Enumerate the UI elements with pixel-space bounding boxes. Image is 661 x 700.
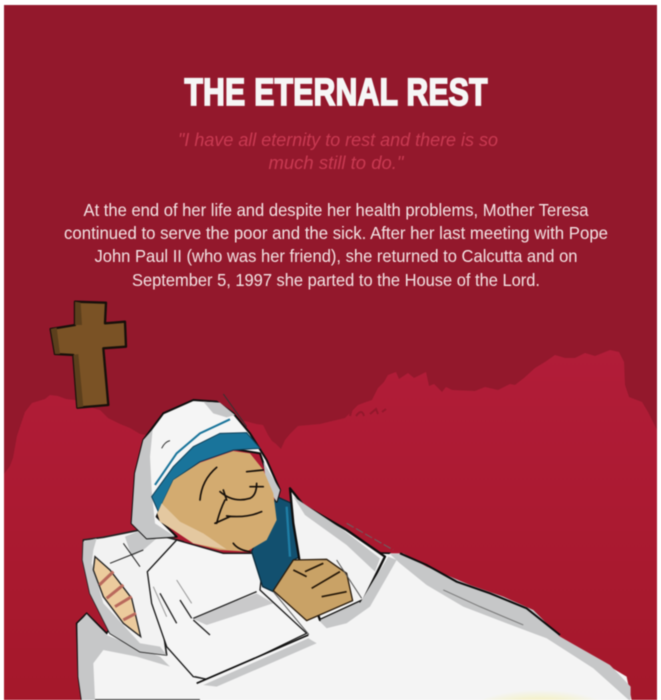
blue scarf at chest [252,497,307,592]
text block: body paragraph: John Paul II (who was her friend), she returned to Calcutta and on [94,246,578,266]
blanket sheet right of hands [290,488,385,620]
headband blue stripes [152,433,260,512]
illustration: Mother Teresa resting in bed [77,394,632,700]
blanket light glow [468,690,612,700]
scarf light stripes [287,507,305,557]
text block: quote [178,130,498,173]
pillow [83,530,183,655]
main blanket [197,553,632,700]
text block: body paragraph: continued to serve the poor and the sick. After her last meeting with Pope [64,223,608,243]
hands [273,559,362,640]
icon: wooden cross [51,302,126,408]
text block: quote: much still to do." [268,153,405,173]
heading: title: THE ETERNAL REST [184,72,488,114]
text block: body paragraph: September 5, 1997 she parted to the House of the Lord. [132,270,540,290]
decoration: faint brush marks at hill edge [341,406,386,416]
blanket left shading [77,614,170,700]
veil [132,394,280,538]
text block: body paragraph: At the end of her life and despite her health problems, Mother Teresa [84,200,589,220]
text block: body paragraph [64,200,608,290]
white habit and sleeve [147,540,307,680]
text block: quote: "I have all eternity to rest and there is so [178,130,498,150]
lower left blanket [77,550,427,700]
panel: lighter red hill [4,350,657,700]
face [157,451,277,552]
